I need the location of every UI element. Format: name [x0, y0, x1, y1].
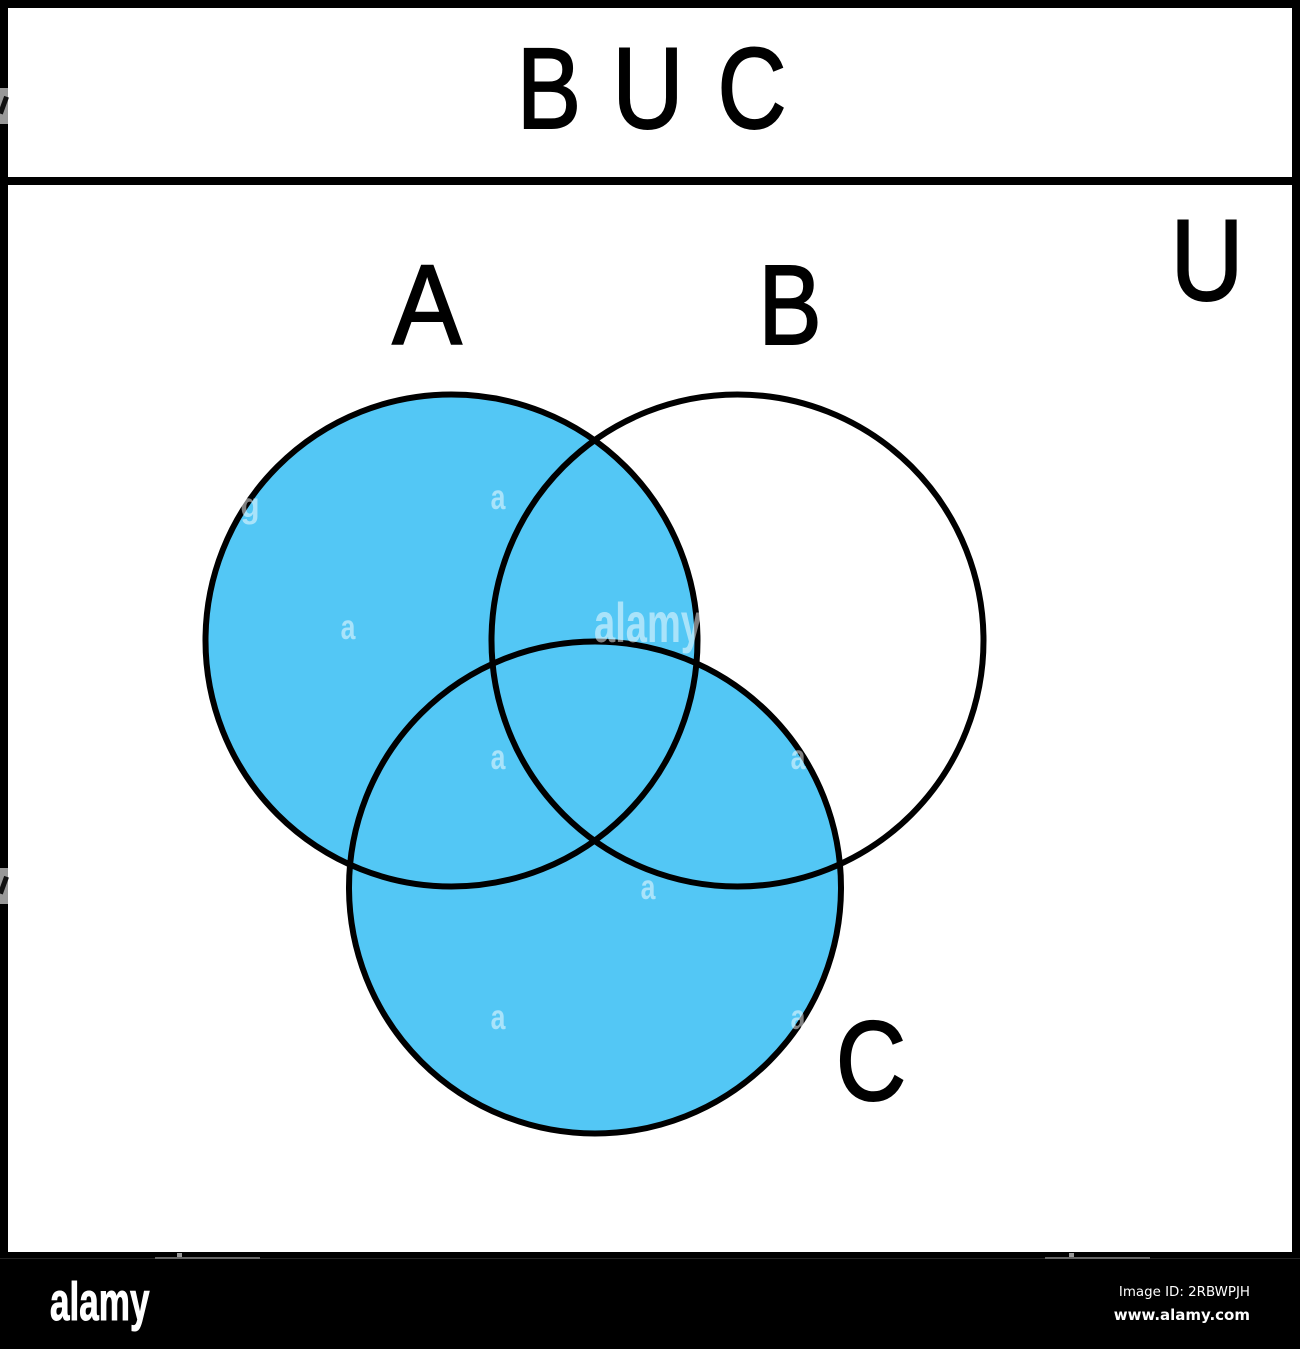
- label: set C: C: [836, 999, 906, 1125]
- watermark marks: a: [491, 477, 506, 517]
- title: B U C: B: [517, 24, 581, 153]
- footer band: [0, 1253, 1300, 1349]
- venn diagram: B union C shaded with A: [206, 394, 984, 1134]
- watermark marks: a: [491, 737, 506, 777]
- title: B U C: [517, 24, 786, 153]
- circle outlines: [206, 394, 984, 1134]
- watermark marks: a: [791, 737, 806, 777]
- footer logo: alamy: alamy: [50, 1271, 150, 1332]
- shaded set C: [349, 642, 841, 1134]
- title: B U C: C: [718, 25, 786, 153]
- label: set A: A: [392, 243, 462, 369]
- watermark marks: [240, 477, 806, 1037]
- watermark marks: a: [641, 867, 656, 907]
- label: universal set U: U: [1170, 196, 1244, 324]
- watermark marks: a: [491, 997, 506, 1037]
- watermark marks: alamy: [594, 593, 702, 655]
- watermark marks: a: [341, 607, 356, 647]
- watermark marks: g: [240, 487, 260, 525]
- footer url: www.alamy.com: [1114, 1306, 1250, 1324]
- title: B U C: U: [612, 24, 684, 153]
- shaded set A: [206, 394, 698, 886]
- label: set B: B: [758, 243, 822, 369]
- footer image id: Image ID: 2RBWPJH: [1119, 1285, 1250, 1300]
- watermark marks: a: [791, 997, 806, 1037]
